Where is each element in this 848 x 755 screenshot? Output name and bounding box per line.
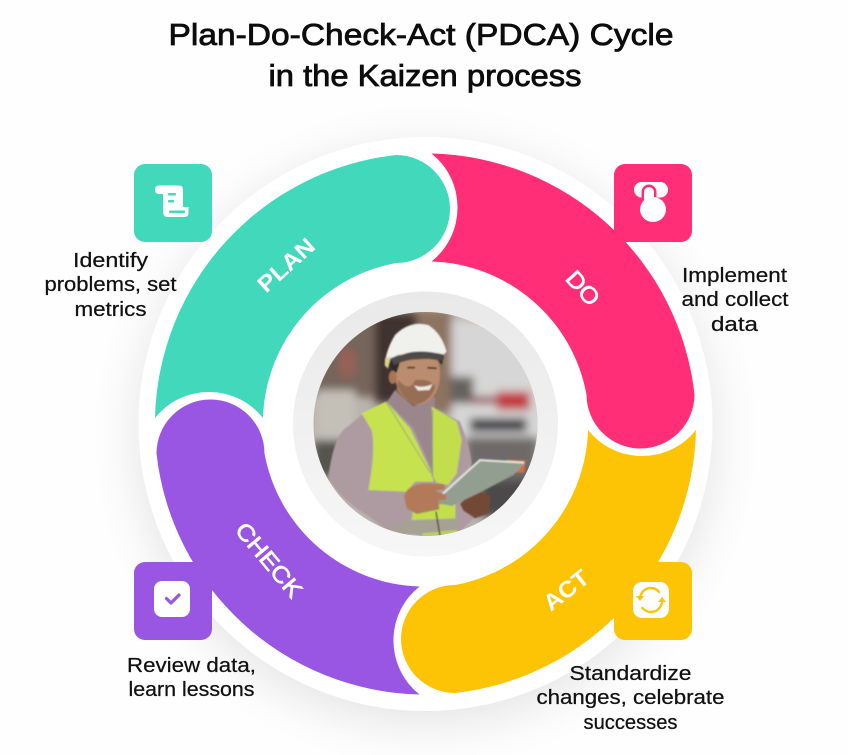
- description: PLAN: problems, set: [44, 274, 177, 296]
- segment: ACT: [401, 430, 696, 693]
- description: CHECK: Review data,: [127, 655, 256, 677]
- icon box: DO pointer: [614, 164, 692, 242]
- segment: DO: [432, 154, 694, 448]
- description: DO: data: [711, 314, 759, 336]
- label: ACT: ACT: [538, 564, 594, 616]
- description: DO: Implement: [682, 265, 787, 287]
- title: [168, 17, 674, 93]
- description: ACT: Standardize: [570, 663, 692, 685]
- description: PLAN: Identify: [73, 250, 148, 272]
- title: in the Kaizen process: [268, 58, 582, 93]
- description: ACT: changes, celebrate: [536, 687, 724, 709]
- segment: PLAN: [155, 155, 450, 418]
- icon box: PLAN scroll: [134, 164, 212, 242]
- icon box: ACT refresh: [614, 562, 692, 640]
- center ring: [293, 292, 558, 556]
- label: DO: DO: [561, 265, 605, 311]
- center photo: worker with clipboard: [310, 310, 545, 540]
- description: PLAN: metrics: [74, 299, 146, 321]
- description: ACT: [536, 663, 724, 734]
- description: ACT: successes: [584, 712, 678, 734]
- description: CHECK: learn lessons: [128, 679, 254, 701]
- description: PLAN: [44, 250, 177, 321]
- white background disc: [138, 137, 712, 711]
- title: Plan-Do-Check-Act (PDCA) Cycle: [168, 17, 674, 52]
- icon box: CHECK checkbox: [134, 562, 212, 640]
- label: PLAN: PLAN: [252, 233, 320, 297]
- description: DO: [682, 265, 789, 336]
- description: CHECK: [127, 655, 256, 701]
- label: CHECK: CHECK: [230, 517, 308, 603]
- description: DO: and collect: [682, 289, 789, 311]
- segment: CHECK: [156, 400, 420, 694]
